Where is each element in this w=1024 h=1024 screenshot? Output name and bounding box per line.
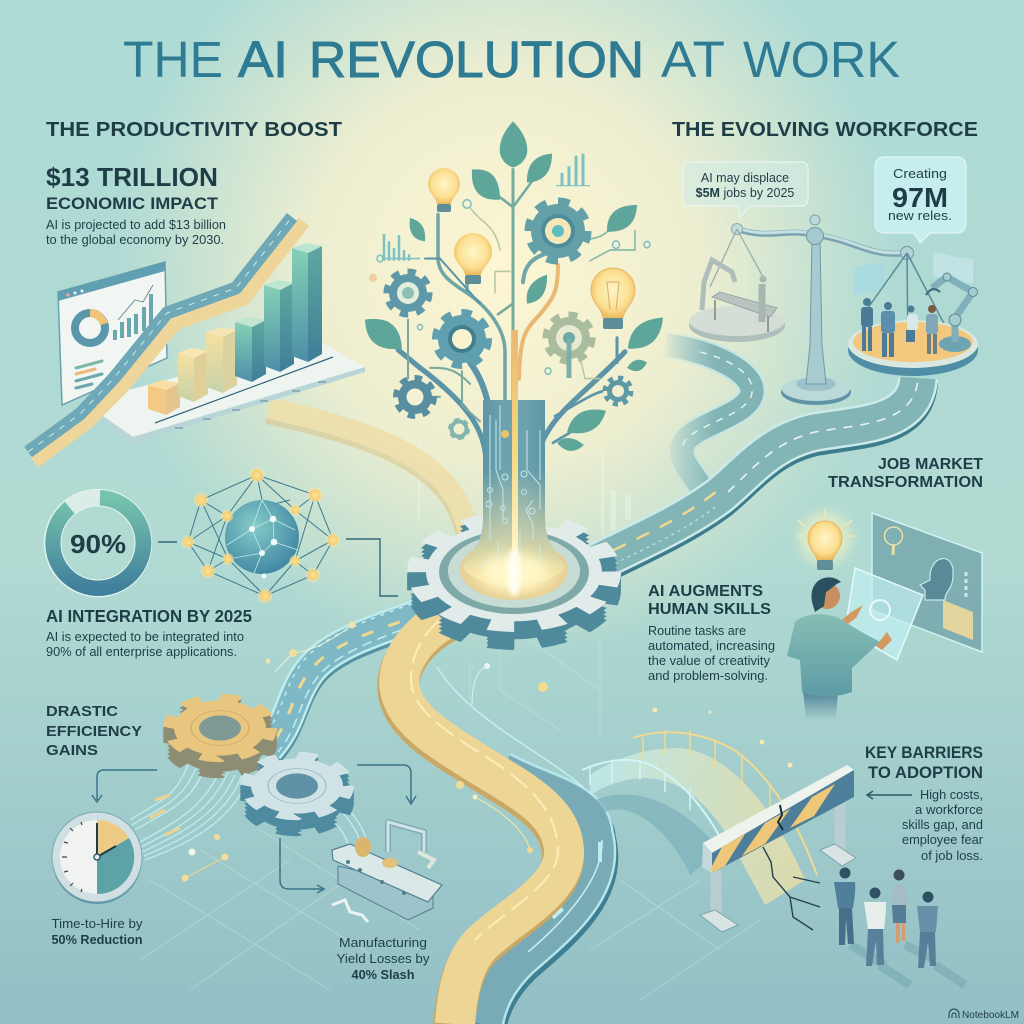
text: manufacturing yield <box>336 936 430 982</box>
callout: displaced jobs: AI may displace <box>701 171 789 185</box>
big screen <box>872 513 982 652</box>
text: AI integration: AI INTEGRATION BY 2025 <box>46 606 252 626</box>
branches <box>398 170 635 486</box>
text: AI augments human skills: automated, increasing <box>648 639 775 653</box>
text: AI integration <box>46 606 252 659</box>
illustration: bridge <box>582 708 817 905</box>
road: right winding main <box>590 378 918 576</box>
text: AI augments human skills: AI AUGMENTS <box>648 583 763 600</box>
text: time-to-hire: Time-to-Hire by <box>52 917 143 931</box>
icon: clock <box>52 812 142 904</box>
text: AI integration: 90% of all enterprise applications. <box>46 645 237 659</box>
heading: key barriers: TO ADOPTION <box>868 763 983 782</box>
title: AI <box>238 31 288 88</box>
callout: new roles: 97M <box>892 182 948 213</box>
text: AI integration: AI is expected to be integrated into <box>46 630 244 644</box>
title: AT <box>661 31 725 88</box>
callout: new roles <box>875 157 966 243</box>
gear: top <box>529 202 587 260</box>
right pan: new roles <box>848 253 978 376</box>
arrow: to conveyor <box>357 765 416 804</box>
tree trunk <box>462 400 566 594</box>
stat: 13 trillion: $13 TRILLION <box>46 162 218 192</box>
people group <box>834 868 965 985</box>
road: right winding upper branch <box>665 345 752 486</box>
central gear <box>420 519 608 643</box>
gear: silver <box>247 756 347 832</box>
mini bar charts and nodes <box>377 154 650 374</box>
heading: drastic efficiency gains: DRASTIC <box>46 703 118 720</box>
road: central gold road <box>398 618 564 1024</box>
gear: olive <box>546 315 592 378</box>
connector line: ring to globe <box>158 541 177 543</box>
progress ring: 90 percent: 90% <box>70 529 126 559</box>
gear: right small <box>605 378 631 404</box>
platform <box>83 340 365 443</box>
text: manufacturing yield: Yield Losses by <box>336 952 430 966</box>
monitor <box>58 262 167 405</box>
stat: 13 trillion: ECONOMIC IMPACT <box>46 194 219 213</box>
decorative sparks near road <box>266 622 548 853</box>
gear: faint <box>450 420 468 438</box>
network globe <box>181 467 340 604</box>
road: gold from chart to tree <box>268 408 470 545</box>
callout: displaced jobs <box>683 162 808 218</box>
title <box>123 31 900 88</box>
callout: new roles: new reles. <box>888 208 952 223</box>
panel: bar chart with monitor and growth road <box>28 217 365 462</box>
glowing nodes on floor <box>182 834 228 882</box>
text: manufacturing yield: 40% Slash <box>352 968 414 982</box>
icon: conveyor with robot arm <box>332 822 442 922</box>
heading: drastic efficiency gains: GAINS <box>46 742 98 759</box>
scale stand <box>732 215 914 405</box>
gear: gold <box>170 698 270 774</box>
text: AI augments human skills: and problem-solving. <box>648 669 768 683</box>
gear: left lower <box>396 378 434 416</box>
road: data stream to the left of gear <box>260 592 452 752</box>
arrow: barriers <box>867 791 912 799</box>
text: barriers body: of job loss. <box>921 849 983 863</box>
road: central blue road <box>437 667 602 1024</box>
panel: balance scale <box>689 215 978 405</box>
leaves <box>365 121 663 451</box>
bulb above head <box>797 509 853 570</box>
text: barriers body: High costs, <box>920 788 983 802</box>
tree branches and leaves <box>365 121 663 486</box>
heading: the evolving workforce: THE EVOLVING WORKFORCE <box>672 119 978 141</box>
tree gears <box>387 168 635 438</box>
heading: key barriers <box>865 743 983 782</box>
text: AI augments human skills: the value of creativity <box>648 654 771 668</box>
heading: drastic efficiency gains <box>46 703 142 759</box>
heading: drastic efficiency gains: EFFICIENCY <box>46 723 142 740</box>
heading: job market transformation: JOB MARKET <box>878 456 984 473</box>
left pan: old factory work <box>689 229 785 342</box>
text: AI augments human skills: Routine tasks are <box>648 624 746 638</box>
title: WORK <box>743 31 900 88</box>
glass panel <box>845 568 923 660</box>
person <box>787 577 892 720</box>
callout: displaced jobs: $5M jobs by 2025 <box>696 186 794 200</box>
text: time-to-hire: 50% Reduction <box>52 933 142 947</box>
text: AI augments human skills: HUMAN SKILLS <box>648 601 771 618</box>
gear: left upper <box>387 272 429 314</box>
heading: key barriers: KEY BARRIERS <box>865 743 983 762</box>
stat: 13 trillion <box>46 162 226 247</box>
illustration: person with AI screens <box>787 509 982 720</box>
title: THE <box>123 31 223 88</box>
connector line: globe to gear <box>346 539 398 596</box>
growth road <box>28 217 304 462</box>
watermark: NotebookLM: NotebookLM <box>962 1009 1019 1021</box>
gear: left middle <box>436 313 488 365</box>
text: AI augments human skills <box>648 583 775 683</box>
heading: the productivity boost: THE PRODUCTIVITY BOOST <box>46 119 342 141</box>
heading: job market transformation <box>828 456 984 491</box>
illustration: barrier <box>700 765 856 932</box>
arrow: to clock <box>92 770 157 802</box>
text: barriers body: a workforce <box>915 803 983 817</box>
text: barriers body: skills gap, and <box>902 818 983 832</box>
arrow: gear to conveyor <box>280 838 324 893</box>
text: manufacturing yield: Manufacturing <box>339 936 427 950</box>
text: barriers body: employee fear <box>902 833 983 847</box>
bulb 3 <box>591 268 635 329</box>
data streams: gears to clock and conveyor <box>130 760 368 878</box>
stat: 13 trillion: AI is projected to add $13 billion <box>46 218 226 232</box>
stat: 13 trillion: to the global economy by 2030. <box>46 233 224 247</box>
bulb 2 <box>454 233 492 284</box>
bulb 1 <box>428 168 460 212</box>
bars <box>148 243 322 415</box>
title: REVOLUTION <box>309 31 644 88</box>
heading: job market transformation: TRANSFORMATION <box>828 474 983 491</box>
trunk flare, traces and light beam <box>462 330 566 596</box>
progress ring: 90 percent <box>44 490 152 596</box>
text: barriers body <box>902 788 983 863</box>
glowing dot <box>369 274 377 282</box>
text: time-to-hire <box>52 917 143 947</box>
callout: new roles: Creating <box>893 166 947 181</box>
